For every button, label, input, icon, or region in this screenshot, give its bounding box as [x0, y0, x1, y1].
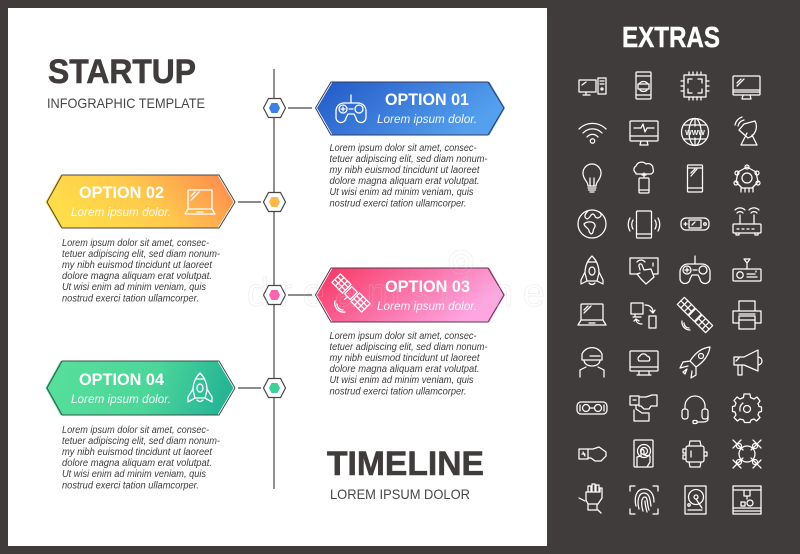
icon: processor chip — [681, 72, 709, 100]
icon: robot hand — [579, 484, 602, 513]
panel: white timeline panel — [8, 8, 547, 546]
text block: option 04 body: dolore magna aliquam erat volutpat. — [62, 458, 212, 469]
icon: www globe: WWW — [685, 130, 705, 137]
banner: option 02: OPTION 02 — [79, 184, 164, 202]
node 3 — [264, 286, 286, 304]
text block: option 03 body: tetuer adipiscing elit, sed diam nonum- — [330, 342, 488, 353]
icon: touch screen hand — [630, 258, 658, 284]
icon: vr head — [580, 348, 604, 377]
text block: option 03 body: dolore magna aliquam erat volutpat. — [330, 364, 480, 375]
node 4 — [264, 378, 286, 398]
icon: wifi — [579, 123, 606, 143]
icon: 3d printer — [733, 486, 761, 514]
title: startup: STARTUP — [48, 53, 196, 91]
icon: rocket — [188, 373, 212, 402]
icon: cloud and phone — [634, 162, 653, 193]
icon: www globe — [682, 118, 708, 146]
icon: hard disk — [685, 486, 706, 514]
icon: gamepad — [336, 95, 366, 123]
icon: desktop and tower — [579, 78, 606, 95]
text block: option 03 body: Ut wisi enim ad minim veniam, quis — [330, 375, 474, 386]
text block: option 03 body — [330, 331, 488, 398]
node 2 — [264, 192, 286, 212]
text block: option 01 body: nostrud exerci tation ullamcorper. — [330, 198, 466, 210]
text block: option 02 body: Ut wisi enim ad minim veniam, quis — [62, 282, 206, 293]
text block: option 01 body — [330, 143, 488, 210]
watermark — [247, 250, 545, 315]
heading: extras: EXTRAS — [622, 22, 720, 54]
icon: megaphone — [734, 350, 762, 375]
text block: option 04 body — [62, 425, 221, 492]
banner: option 01 — [316, 82, 505, 135]
banner: option 04: OPTION 04 — [79, 371, 165, 389]
text block: option 02 body — [62, 238, 221, 304]
icon: phone with fingerprint — [636, 72, 651, 99]
icon: vr goggles — [577, 402, 607, 414]
text block: option 01 body: my nibh euismod tincidunt ut laoreet — [330, 165, 481, 176]
icon: vibrating phone — [628, 211, 660, 238]
text block: option 01 body: dolore magna aliquam erat volutpat. — [330, 176, 480, 187]
subheading: LOREM IPSUM DOLOR — [330, 486, 470, 502]
banner: option 01: OPTION 01 — [385, 91, 469, 109]
icon: monitor — [733, 76, 760, 99]
text block: option 02 body: my nibh euismod tincidunt ut laoreet — [62, 260, 213, 271]
banner: option 02: Lorem ipsum dolor. — [71, 205, 171, 219]
icon grid — [577, 72, 762, 514]
banner: option 03: Lorem ipsum dolor. — [377, 299, 477, 313]
text block: option 02 body: dolore magna aliquam erat volutpat. — [62, 271, 212, 282]
icon: projector — [733, 259, 761, 281]
banner: option 04 — [46, 361, 235, 415]
text block: option 01 body: tetuer adipiscing elit, sed diam nonum- — [330, 154, 488, 165]
text block: option 03 body: Lorem ipsum dolor sit amet, consec- — [330, 331, 477, 342]
icon: monitor pulse — [630, 121, 658, 145]
icon: device sync — [631, 303, 656, 328]
text block: option 03 body: my nibh euismod tincidunt ut laoreet — [330, 353, 481, 364]
icon: space rocket — [581, 256, 603, 284]
icon: tablet touch — [634, 440, 653, 467]
icon: monitor cloud — [630, 351, 658, 375]
banner: option 01: Lorem ipsum dolor. — [377, 112, 477, 126]
icon: smartphone — [688, 165, 702, 192]
icon: satellite dish — [735, 117, 757, 145]
banner: option 02 — [46, 175, 235, 228]
icon: printer — [733, 301, 761, 329]
icon: router — [733, 208, 761, 235]
icon: gear — [732, 394, 762, 422]
icon: network wheel — [734, 165, 760, 192]
text block: option 02 body: Lorem ipsum dolor sit amet, consec- — [62, 238, 210, 249]
icon: launching rocket — [680, 347, 710, 378]
icon: earth globe — [578, 210, 606, 238]
timeline axis — [238, 69, 312, 489]
text block: option 04 body: nostrud exerci tation ullamcorper. — [62, 480, 199, 492]
banner: option 03 — [316, 268, 505, 322]
icon: laptop — [578, 304, 606, 325]
watermark: dreamstime — [247, 271, 545, 315]
icon: drone — [733, 440, 761, 468]
text block: option 04 body: tetuer adipiscing elit, sed diam nonum- — [62, 436, 221, 447]
text block: option 03 body: nostrud exerci tation ullamcorper. — [330, 386, 466, 398]
icon: smartwatch — [683, 441, 707, 467]
icon: hand with device — [630, 395, 657, 421]
icon: headset — [682, 396, 708, 424]
text block: option 04 body: Ut wisi enim ad minim veniam, quis — [62, 469, 206, 480]
banner: option 03: OPTION 03 — [385, 278, 470, 296]
icon: game controller — [680, 256, 710, 284]
heading: timeline: TIMELINE — [327, 445, 484, 483]
icon: wrist watch — [579, 447, 606, 461]
node 1 — [264, 98, 286, 118]
banner: option 04: Lorem ipsum dolor. — [71, 392, 171, 406]
text block: option 01 body: Lorem ipsum dolor sit amet, consec- — [330, 143, 477, 154]
text block: option 01 body: Ut wisi enim ad minim veniam, quis — [330, 187, 474, 198]
icon: satellite — [330, 274, 370, 314]
icon: light bulb — [583, 164, 601, 192]
text block: option 02 body: tetuer adipiscing elit, sed diam nonum- — [62, 249, 221, 260]
text block: option 04 body: Lorem ipsum dolor sit amet, consec- — [62, 425, 210, 436]
text block: option 04 body: my nibh euismod tincidunt ut laoreet — [62, 447, 213, 458]
icon: fingerprint scan — [630, 486, 658, 514]
text block: option 02 body: nostrud exerci tation ullamcorper. — [62, 294, 199, 304]
icon: laptop — [185, 190, 215, 214]
subtitle: INFOGRAPHIC TEMPLATE — [47, 95, 205, 111]
icon: satellite — [677, 297, 713, 333]
icon: handheld console — [681, 218, 709, 230]
